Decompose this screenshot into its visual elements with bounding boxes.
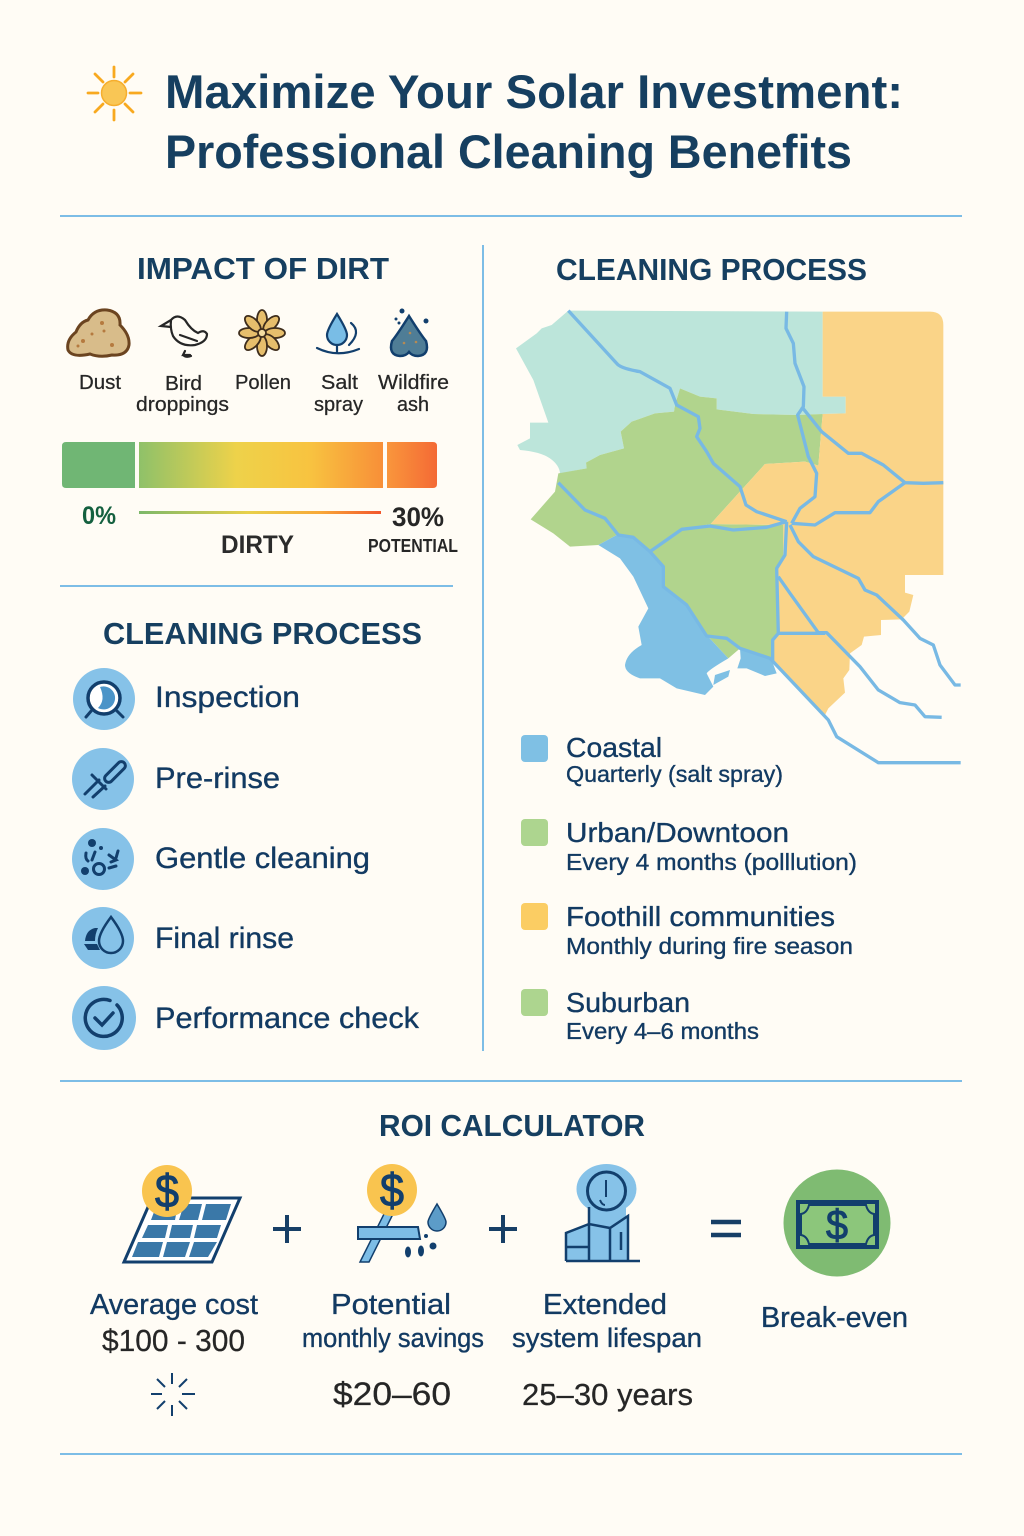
dirt type labels: Dust <box>79 372 121 394</box>
map <box>516 311 961 763</box>
legend: coastal <box>521 732 783 787</box>
icon: sun <box>88 67 141 120</box>
heading: impact of dirt: IMPACT OF DIRT <box>137 251 389 286</box>
region: foothill orange <box>711 312 943 715</box>
icon: pollen <box>239 310 285 356</box>
dirt type labels: droppings <box>136 394 229 416</box>
legend: suburban: Every 4–6 months <box>566 1018 759 1044</box>
heading: cleaning process list: CLEANING PROCESS <box>103 616 422 651</box>
roi: potential monthly savings <box>302 1289 484 1412</box>
bar scale: 0% <box>82 502 116 530</box>
step: performance check <box>72 986 136 1050</box>
dirt type labels: Pollen <box>235 372 291 394</box>
label: gentle cleaning: Gentle cleaning <box>155 842 370 875</box>
dirt type labels: Salt <box>321 372 358 394</box>
dirt type labels: spray <box>314 394 363 416</box>
bar scale: 30% <box>392 502 444 532</box>
icon: dollar bill <box>784 1170 890 1276</box>
bar scale <box>82 502 458 559</box>
operator: plus <box>273 1215 301 1243</box>
label: performance check: Performance check <box>155 1002 420 1035</box>
operator: equals <box>711 1222 741 1235</box>
icon: hose with coin <box>358 1164 446 1262</box>
label: pre-rinse: Pre-rinse <box>155 762 280 795</box>
title <box>165 65 903 178</box>
icon: clock tower <box>566 1164 640 1261</box>
legend: coastal: Coastal <box>566 732 662 763</box>
roi: extended lifespan: system lifespan <box>512 1323 702 1353</box>
dirt type labels: ash <box>397 394 429 416</box>
legend: urban: Urban/Downtoon <box>566 817 789 848</box>
legend: foothill: Monthly during fire season <box>566 933 853 959</box>
title: Maximize Your Solar Investment: <box>165 65 903 118</box>
roi: potential monthly savings: $20–60 <box>333 1376 451 1412</box>
icon: solar panel with coin: $ <box>155 1165 179 1217</box>
roi: extended lifespan: Extended <box>543 1289 667 1321</box>
gradient bar <box>62 442 437 488</box>
roi: average cost <box>90 1289 258 1358</box>
region: urban green <box>531 388 823 552</box>
region: suburban green <box>650 524 783 658</box>
icon: solar panel with coin <box>124 1165 240 1262</box>
legend: foothill <box>521 901 853 959</box>
step: pre-rinse <box>72 748 134 810</box>
legend: suburban: Suburban <box>566 987 690 1018</box>
icon: dollar bill: $ <box>826 1201 848 1248</box>
label: inspection: Inspection <box>155 681 300 714</box>
region: northern teal <box>516 311 846 473</box>
legend: urban <box>521 817 857 875</box>
icon: bird <box>161 316 207 357</box>
legend: urban: Every 4 months (polllution) <box>566 849 857 875</box>
region: coastal blue <box>598 535 777 695</box>
step: inspection <box>73 668 135 730</box>
roi: average cost: $100 - 300 <box>102 1323 245 1358</box>
roi: extended lifespan: 25–30 years <box>522 1377 693 1412</box>
dirt type labels: Bird <box>165 373 202 395</box>
heading: roi calculator: ROI CALCULATOR <box>379 1108 645 1143</box>
step: final rinse <box>72 907 134 969</box>
roi: break-even: Break-even <box>761 1302 908 1334</box>
highways <box>558 311 961 763</box>
bar scale: POTENTIAL <box>368 536 458 556</box>
icon: wildfire ash <box>391 308 428 356</box>
legend: suburban <box>521 987 759 1044</box>
step: gentle cleaning <box>72 828 134 890</box>
title: Professional Cleaning Benefits <box>165 125 852 178</box>
label: final rinse: Final rinse <box>155 922 294 955</box>
icon: salt spray <box>317 314 359 353</box>
icon: dust <box>68 310 129 356</box>
legend: foothill: Foothill communities <box>566 901 835 932</box>
icon: sparkle <box>151 1373 195 1416</box>
dirt type labels <box>79 372 449 416</box>
icon: hose with coin: $ <box>380 1164 404 1216</box>
roi: potential monthly savings: monthly savings <box>302 1323 484 1353</box>
bar scale: DIRTY <box>221 531 294 559</box>
roi: potential monthly savings: Potential <box>331 1289 451 1321</box>
heading: cleaning process map: CLEANING PROCESS <box>556 252 867 287</box>
dirt type labels: Wildfire <box>378 372 449 394</box>
operator: plus <box>489 1215 517 1243</box>
legend: coastal: Quarterly (salt spray) <box>566 761 783 787</box>
roi: extended lifespan <box>512 1289 702 1412</box>
roi: average cost: Average cost <box>90 1289 258 1321</box>
